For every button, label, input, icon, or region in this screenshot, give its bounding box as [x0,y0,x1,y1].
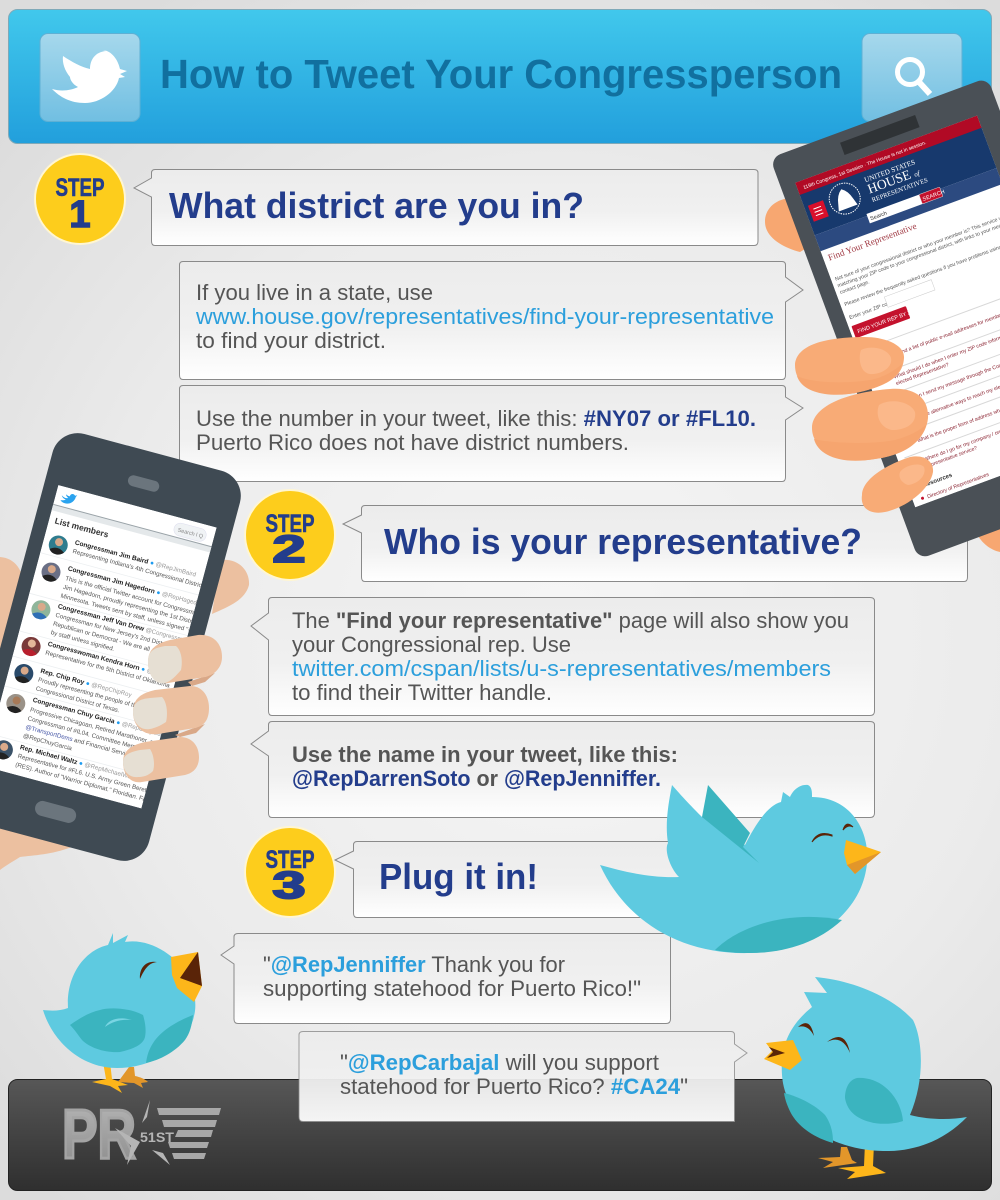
phone screen: list members: Rep. Chip Roy ● @RepChipRoy [40,668,133,699]
phone screen: list members: Progressive Chicagoan, Retired Marathoner, and [29,706,161,748]
phone screen: list members: @RepChuyGarcia [22,733,73,752]
text block: use the name: @RepDarrenSoto or @RepJenniffer. [292,766,661,791]
step 3 heading [335,842,680,918]
phone screen: list members: Minnesota. Tweets sent by staff, unless signed "-JH" [60,593,200,636]
phone screen: list members: Search l Q [177,528,204,540]
step 3 heading: Plug it in! [379,856,538,897]
phone screen: list members: Jim Hagedorn, proudly representing the 1st District of [62,584,205,628]
step 2 badge: 2 [272,529,306,571]
phone screen: list members: Republican or Democrat - We are all Americans [52,621,180,661]
phone screen: find your representative page: HOUSE of [865,163,922,196]
icon: search [862,34,962,122]
footer bar [8,1080,992,1190]
phone screen: list members: Congressman for New Jersey's 2nd District. [55,612,173,650]
text block: find handle: your Congressional rep. Use [292,632,571,657]
phone screen: list members: Congressman Jim Baird ● @RepJimBaird [74,539,197,579]
text block: use the name: Use the name in your tweet, like this: [292,742,678,767]
phone screen: list members [0,485,217,808]
hand and phone: house website [765,76,1000,559]
logo: PR51st: 51ST [140,1129,174,1145]
phone screen: find your representative page: UNITED STATES [863,158,916,184]
phone body [0,427,252,868]
step 2 badge: STEP [266,510,314,538]
phone screen: list members: Representative for #FL6. U.S. Army Green Beret Lt. Col. [17,753,168,800]
tweet example 1: "@RepJenniffer Thank you for [263,952,565,977]
hand and phone: twitter list [0,427,252,870]
step 3 badge [245,827,335,917]
text block: district number: Use the number in your tweet, like this: #NY07 or #FL10. [196,406,756,431]
tweet example 2: statehood for Puerto Rico? #CA24" [340,1074,688,1099]
tweet example 1: supporting statehood for Puerto Rico!" [263,976,641,1001]
step 1 badge [35,154,125,244]
phone screen: list members: Congressman Jeff Van Drew @CongressmanJVD [57,603,202,648]
hand behind phone [0,557,249,870]
phone screen: list members: Congresswoman Kendra Horn ● @RepKendraHorn [47,641,198,687]
phone screen: list members: Representing Indiana's 4th Congressional District [72,548,204,590]
icon: twitter bird [40,34,140,122]
text block: find handle: twitter.com/cspan/lists/u-s-representatives/members [292,656,831,681]
step 3 badge: STEP [266,846,314,874]
step 1 badge: STEP [56,174,104,202]
phone screen: find your representative page: Resources [922,472,954,489]
text block: district number [180,386,803,482]
phone screen: list members: This is the official Twitter account for Congressman [64,575,202,618]
text block: find handle: to find their Twitter handle. [292,680,552,705]
phone screen: find your representative page: Find Your Representative [827,221,918,263]
phone screen: find your representative page: SEARCH [922,189,946,203]
phone screen: list members: by staff unless signified. [50,629,115,653]
step 1 heading [134,170,758,246]
phone screen: list members: Proudly representing the people of the 21st [37,677,154,714]
step 2 heading [343,506,968,582]
bird: left singing [43,933,202,1093]
step 1 heading: What district are you in? [169,185,584,226]
phone screen: list members: Representative for the 5th District of Oklahoma [45,650,171,690]
step 1 badge: 1 [69,194,91,236]
phone screen: list members: (RES). Author of "Warrior Diplomat." Floridian. Father. [14,762,159,806]
phone screen: find your representative page: 119th Congress, 1st Session · The House is not in session. [803,140,927,191]
step 2 heading: Who is your representative? [384,521,862,562]
phone screen: list members: Congressional District of Texas. [35,685,121,714]
finger 3 [862,456,933,513]
text block: find handle [251,598,874,716]
text block: find your district: www.house.gov/representatives/find-your-representative [195,304,774,329]
phone screen: find your representative page: representative service? [926,445,978,470]
phone screen: find your representative page [795,106,1000,507]
phone screen: list members: @TransportDems and Financial Services. IG: [25,724,147,763]
phone body [770,76,1000,559]
finger 2 [812,389,928,461]
text block: use the name [251,722,874,818]
phone screen: find your representative page: contact page. [839,279,870,296]
phone screen: find your representative page: Search [870,211,888,222]
phone screen: list members: List members [54,516,110,540]
hand palm [765,198,1000,552]
step 2 badge [245,490,335,580]
phone screen: find your representative page: REPRESENTATIVES [871,177,929,204]
logo: PR51st: PR [62,1095,136,1173]
text block: find your district: If you live in a state, use [196,280,433,305]
text block: district number: Puerto Rico does not have district numbers. [196,430,629,455]
tweet example 1 [221,934,670,1024]
finger 1 [795,337,904,395]
finger 1 [148,635,222,686]
phone screen: list members: Congressman Chuy Garcia ● @RepChuyGarcia [32,697,172,741]
phone screen: find your representative page: Directory of Representatives [927,472,990,500]
title: How to Tweet Your Congressperson [160,51,842,97]
phone screen: find your representative page: Enter your ZIP code: [849,299,895,321]
text block: find your district: to find your district. [196,328,386,353]
text block: find handle: The "Find your representative" page will also show you [292,608,849,633]
logo: PR51st [62,1095,221,1173]
finger 2 [133,686,209,737]
phone screen: list members: Congressman of #IL04. Committee Member on [27,715,154,755]
bird: right singing [764,977,967,1179]
phone screen: list members: Congressman Jim Hagedorn ● @RepHagedorn [67,565,207,609]
phone screen: list members: Rep. Michael Waltz ● @RepMichaelWaltz [19,744,138,782]
phone screen: find your representative page: elected Representative? [895,362,950,387]
text block: find your district [180,262,803,380]
phone screen: find your representative page: FIND YOUR REP BY ZIP [857,308,917,335]
header banner [8,10,992,144]
bird: flying [600,785,881,953]
finger 3 [123,737,199,782]
tweet example 2: "@RepCarbajal will you support [340,1050,659,1075]
step 3 badge: 3 [272,865,306,907]
tweet example 2 [299,1032,747,1122]
